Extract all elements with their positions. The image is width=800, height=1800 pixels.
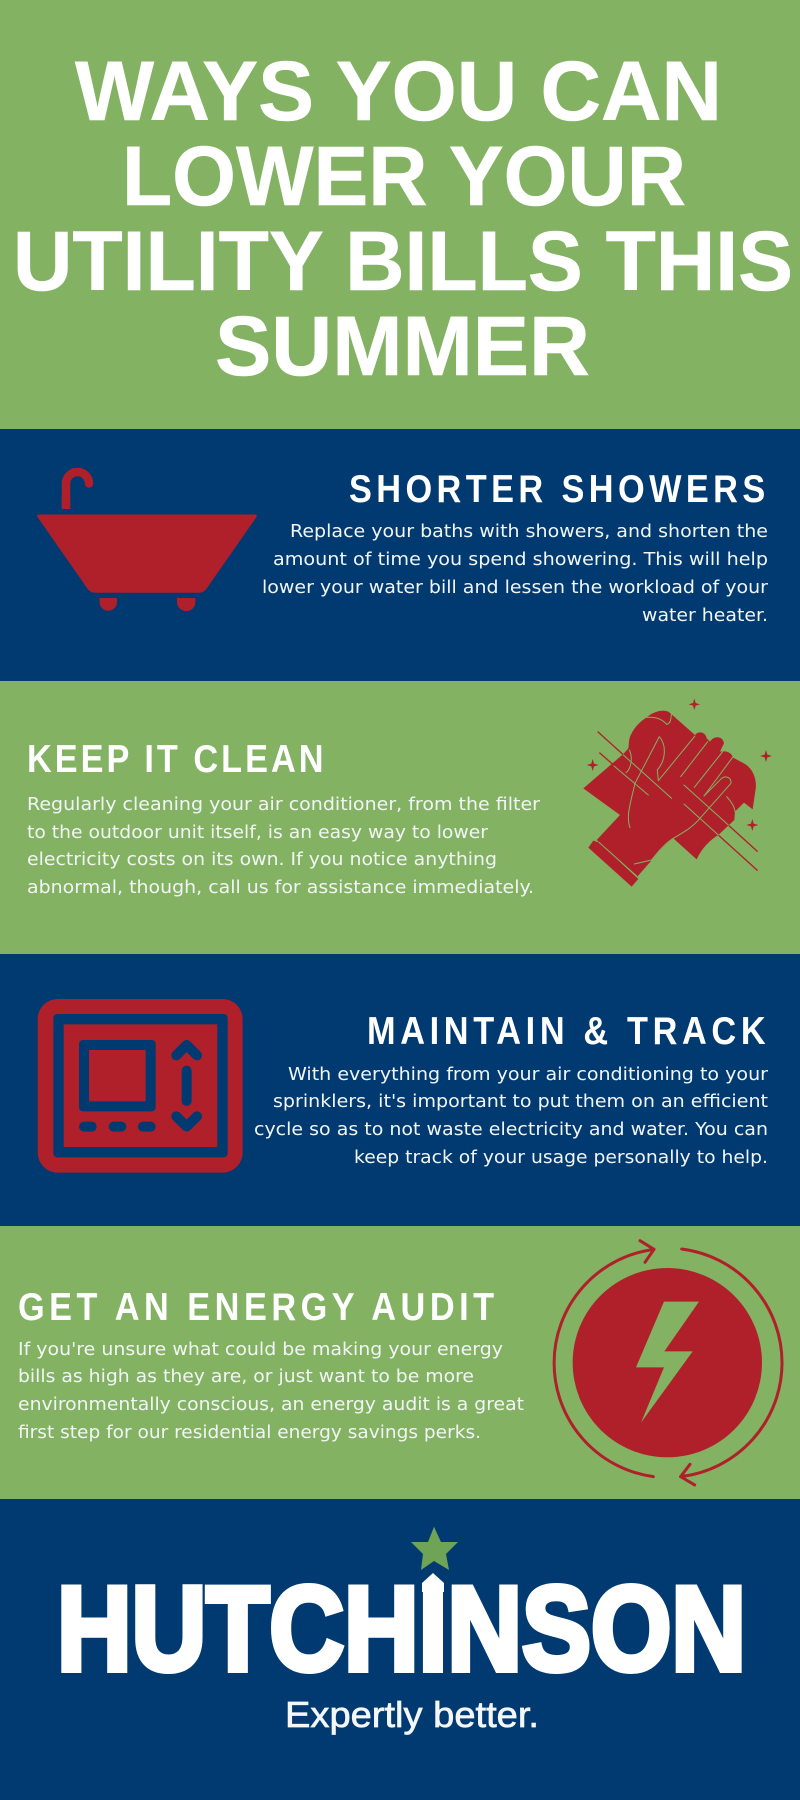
icon: green star [411,1527,458,1570]
panel: logo footer [0,1499,800,1800]
heading: shorter showers: SHORTER SHOWERS [349,467,765,510]
text: keep it clean body: Regularly cleaning your air conditioner, from the filter [27,795,541,815]
icon: energy bolt with cycle arrows [554,1241,782,1485]
icon: gloved hand with cloth [583,699,772,887]
text: keep it clean body: electricity costs on its own. If you notice anything [27,850,497,870]
title [13,44,793,393]
title: SUMMER [215,299,590,393]
text: shorter showers body: water heater. [642,606,768,626]
text: shorter showers body: Replace your baths with showers, and shorten the [290,522,768,542]
text: energy audit body [18,1340,524,1443]
text: shorter showers body: amount of time you spend showering. This will help [273,550,768,570]
text: maintain and track body: With everything from your air conditioning to your [288,1065,769,1085]
text: energy audit body: If you're unsure what could be making your energy [18,1340,503,1360]
text: energy audit body: bills as high as they are, or just want to be more [18,1367,474,1387]
text: energy audit body: environmentally conscious, an energy audit is a great [18,1395,524,1415]
text: keep it clean body: abnormal, though, call us for assistance immediately. [27,878,534,898]
text: shorter showers body: lower your water bill and lessen the workload of your [262,578,769,598]
panel: title background [0,0,800,429]
title: WAYS YOU CAN [75,44,722,138]
icon: thermostat [38,999,243,1173]
text: energy audit body: first step for our residential energy savings perks. [18,1423,481,1443]
text: maintain and track body [254,1065,769,1168]
title: UTILITY BILLS THIS [13,214,793,308]
text: shorter showers body [262,522,769,626]
title: LOWER YOUR [122,129,686,223]
panel: maintain and track [0,954,800,1226]
text: maintain and track body: keep track of your usage personally to help. [354,1148,768,1168]
heading: keep it clean: KEEP IT CLEAN [27,737,324,780]
text: keep it clean body: to the outdoor unit itself, is an easy way to lower [27,823,489,843]
icon: bathtub [37,472,257,611]
panel: shorter showers [0,429,800,681]
panel: energy audit [0,1226,800,1499]
text: keep it clean body [27,795,541,898]
heading: get an energy audit: GET AN ENERGY AUDIT [18,1285,495,1328]
panel: keep it clean [0,681,800,954]
heading: maintain and track: MAINTAIN & TRACK [367,1009,766,1052]
text: maintain and track body: cycle so as to not waste electricity and water. You can [254,1120,768,1140]
text: maintain and track body: sprinklers, it's important to put them on an efficient [273,1092,768,1112]
logo tagline: Expertly better. [285,1694,539,1735]
